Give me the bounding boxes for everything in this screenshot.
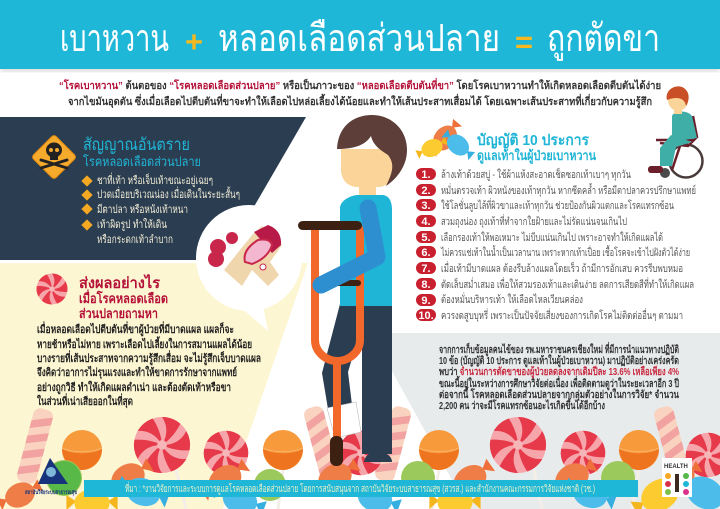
list: danger signs: มีตาปลา หรือหนังเท้าหนา (97, 203, 188, 216)
list: danger signs: ชาที่เท้า หรือเจ็บเท้าขณะอยู่เฉยๆ (97, 172, 213, 187)
panel: cream effects panel (0, 263, 308, 509)
heading: consequences (79, 273, 168, 321)
list: danger signs: ปวดเมื่อยบริเวณน่อง เมื่อเดินในระยะสั้นๆ (97, 186, 240, 201)
heading: consequences: ส่วนปลายถามหา (79, 306, 158, 321)
paragraph: consequences: จึงคิดว่าอาการไม่รุนแรงและทำให้ขาดการรักษาจากแพทย์ (37, 365, 237, 380)
paragraph: consequences: เมื่อหลอดเลือดไปตีบตันที่ขาผู้ป่วยที่มีบาดแผล แผลก็จะ (37, 321, 234, 337)
icon: artery (224, 225, 282, 286)
list: danger signs (81, 172, 240, 246)
rule numbers: 10. (418, 310, 434, 322)
orange lollipops (62, 430, 659, 470)
heading: 10 rules (477, 131, 596, 164)
rule numbers: 9. (421, 295, 431, 307)
rule number pills (416, 168, 436, 321)
rule numbers: 7. (421, 263, 431, 275)
illustration: person with crutch (298, 115, 407, 466)
list: danger signs: เท้าผิดรูป ทำให้เดิน (97, 218, 167, 231)
front leg (362, 304, 392, 454)
list: danger signs: หรือกระดกเท้าลำบาก (97, 233, 173, 246)
rule numbers (418, 169, 434, 322)
rule numbers: 8. (421, 279, 431, 291)
rule numbers: 1. (421, 169, 431, 181)
title (60, 18, 660, 61)
source strip (84, 480, 638, 497)
pink lollipops (129, 415, 720, 479)
heading: consequences: ส่งผลอย่างไร (79, 273, 161, 292)
neck (359, 182, 376, 197)
panel: danger signs (0, 117, 306, 260)
paragraph: study results: 2,200 คน ว่าจะมีโรคแทรกซ้อนอะไรเกิดขึ้นได้อีกบ้าง (439, 397, 605, 412)
green lollipops (46, 460, 635, 501)
icon: wrapped candies (414, 116, 477, 163)
rule numbers: 6. (421, 247, 431, 259)
rule text: สวมถุงน่อง ถุงเท้าที่ทำจากใยฝ้ายและไม่รัดแน่นจนเกินไป (441, 214, 627, 228)
intro text: จากไขมันอุดตัน ซึ่งเมื่อเลือดไปตีบตันที่ขาจะทำให้เลือดไปหล่อเลี้ยงได้น้อยและทำให้เส้นประสาทเสื่อมได้ โดยเฉพาะเส้นประสาทที่เกี่ยวกับความรู้สึก (68, 93, 652, 109)
rule text (440, 167, 696, 322)
rule text: ล้างเท้าด้วยสบู่ - ใช้ผ้าแห้งสะอาดเช็ดซอกเท้าเบาๆ ทุกวัน (441, 167, 631, 181)
rule numbers: 3. (421, 200, 431, 212)
icon: skull warning diamond (31, 134, 77, 180)
paragraph: study results (439, 341, 680, 412)
head (341, 149, 400, 187)
heading: 10 rules: บัญญัติ 10 ประการ (477, 131, 590, 149)
rule numbers: 5. (421, 232, 431, 244)
striped lollipops (16, 405, 691, 485)
title: = (515, 26, 533, 59)
paragraph: consequences: ในส่วนที่เน่าเสียออกในที่สุด (37, 393, 133, 409)
paragraph: consequences (37, 321, 261, 409)
crutch (315, 226, 360, 440)
header band (0, 0, 720, 71)
title: หลอดเลือดส่วนปลาย (218, 18, 500, 60)
heading: 10 rules: ดูแลเท้าในผู้ป่วยเบาหวาน (477, 147, 596, 164)
paragraph: consequences: อย่างถูกวิธี ทำให้เกิดแผลดำเน่า และต้องตัดเท้าหรือขา (37, 380, 231, 395)
candy row (0, 405, 720, 509)
intro text (59, 77, 661, 109)
panel: consequences (34, 272, 261, 409)
logo: HSRI (25, 458, 81, 496)
title: ถูกตัดขา (547, 18, 660, 61)
icon: pink candy (34, 272, 70, 306)
title: + (185, 26, 203, 59)
wrapped candies (0, 453, 720, 509)
rule numbers: 2. (421, 185, 431, 197)
illustration: man in wheelchair (648, 86, 702, 178)
bandage (327, 402, 361, 438)
heading: danger signs (83, 135, 201, 169)
list: ten rules (416, 167, 696, 322)
paragraph: consequences: หายช้าหรือไม่หาย เพราะเลือดไปเลี้ยงในการสมานแผลได้น้อย (37, 336, 252, 351)
intro text: “โรคเบาหวาน” ต้นตอของ “โรคหลอดเลือดส่วนปลาย” หรือเป็นภาวะของ “หลอดเลือดตีบตันที่ขา” โดยโรคเบาหวานทำให้เกิดหลอดเลือดตีบตันได้ง่าย (59, 77, 661, 92)
arm (321, 208, 377, 285)
icon: blood cells (208, 232, 238, 267)
candy sticks (70, 470, 710, 509)
logo: HSRI: สถาบันวิจัยระบบสาธารณสุข (25, 488, 77, 496)
heading: consequences: เมื่อโรคหลอดเลือด (79, 289, 168, 306)
rule text: ต้องหมั่นบริหารเท้า ให้เลือดไหลเวียนคล่อง (441, 292, 583, 306)
heading: danger signs: โรคหลอดเลือดส่วนปลาย (83, 154, 201, 169)
thumbnail: Health Infographic (662, 458, 692, 497)
title: เบาหวาน (60, 18, 169, 60)
rule numbers: 4. (421, 216, 431, 228)
speech bubble: artery illustration (196, 205, 302, 331)
back leg (322, 304, 362, 409)
panel: grey study panel (371, 333, 720, 509)
paragraph: consequences: บางรายที่เส้นประสาทจากความรู้สึกเสื่อม จะไม่รู้สึกเจ็บบาดแผล (37, 350, 261, 366)
thumbnail: Health Infographic: HEALTH (664, 464, 688, 470)
heading: danger signs: สัญญาณอันตราย (83, 135, 190, 154)
torso (340, 195, 392, 306)
